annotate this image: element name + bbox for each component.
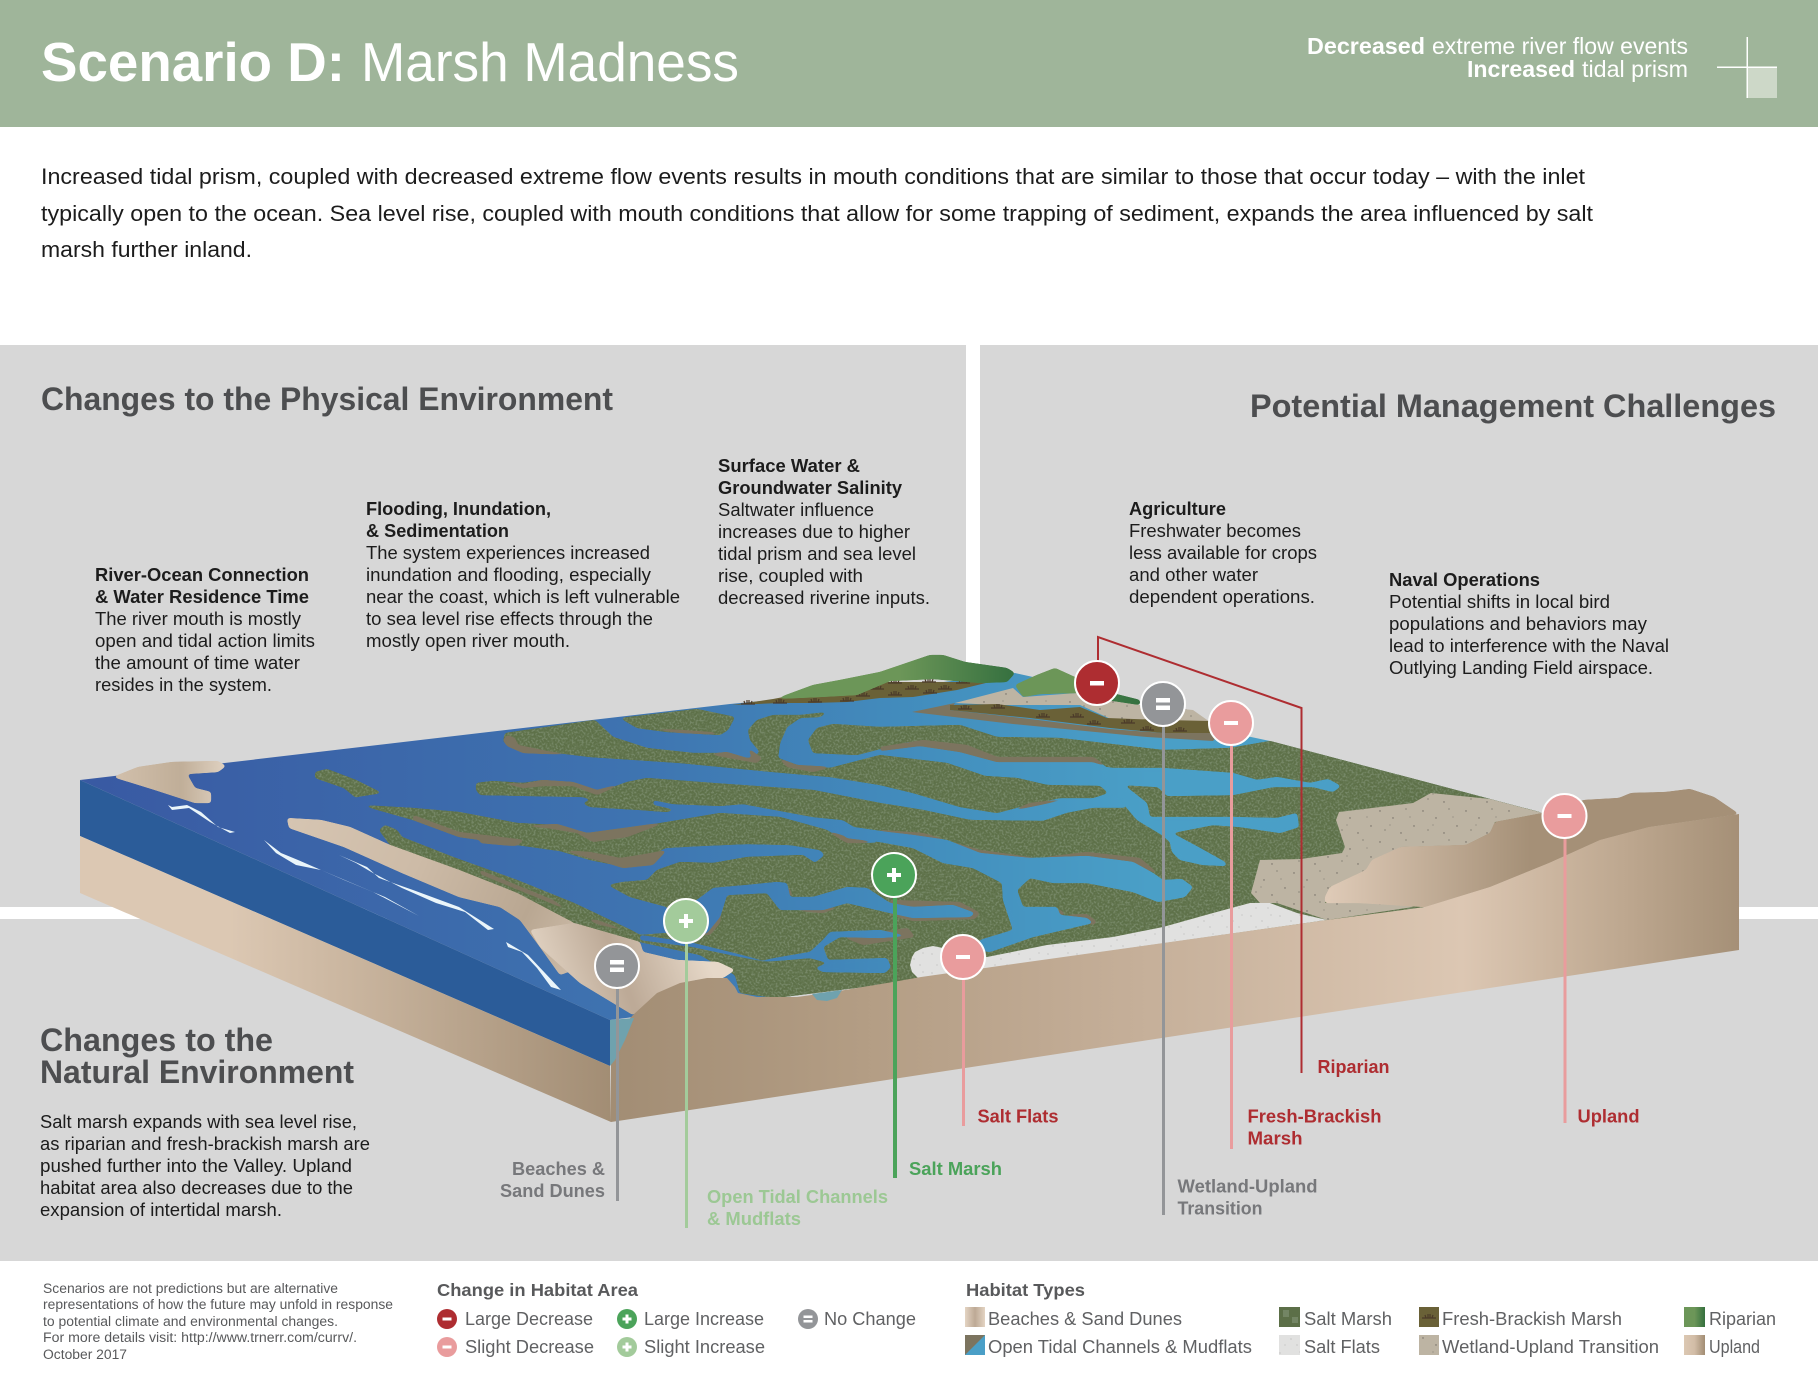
text block: agriculture: Freshwater becomes [1129, 521, 1301, 541]
callout: salt marsh [872, 853, 1002, 1179]
text block: flooding: mostly open river mouth. [366, 631, 570, 651]
legend item: slight increase: Slight Increase [644, 1337, 765, 1357]
riparian rear hill [1015, 668, 1140, 705]
callout: riparian [1075, 637, 1390, 1077]
callout: open tidal channels and mudflats: & Mudflats [707, 1209, 801, 1229]
legend: habitat types [965, 1280, 1776, 1357]
legend item: salt flats [1279, 1335, 1380, 1357]
callout: wetland-upland transition [1141, 682, 1318, 1218]
channel cross-section at corner [610, 1018, 634, 1066]
text block: salinity: decreased riverine inputs. [718, 588, 930, 608]
header band [0, 0, 1818, 127]
icon: scenario quadrant [1717, 37, 1777, 98]
callout: beaches and sand dunes: Beaches & [512, 1159, 605, 1179]
legend item: slight decrease: Slight Decrease [465, 1337, 594, 1357]
legend item: salt marsh [1279, 1307, 1392, 1329]
text block: agriculture: Agriculture [1129, 499, 1226, 519]
text block: naval operations: Naval Operations [1389, 570, 1540, 590]
scenario drivers: extreme river flow events [1432, 33, 1688, 59]
footer disclaimer: representations of how the future may unfold in response [43, 1297, 393, 1312]
footer disclaimer: For more details visit: http://www.trnerr.com/currv/. [43, 1330, 357, 1345]
text block: flooding: to sea level rise effects through the [366, 609, 653, 629]
legend: change in habitat area [437, 1280, 916, 1357]
heading: natural environment: Changes to the [40, 1022, 273, 1058]
intro text: marsh further inland. [41, 237, 252, 262]
heading: physical environment: Changes to the Physical Environment [41, 381, 613, 417]
text block: salinity [718, 456, 930, 608]
callout: fresh-brackish marsh [1209, 701, 1382, 1149]
mudflats [413, 728, 1160, 950]
ocean side face [80, 780, 610, 1066]
panel: management challenges background [980, 345, 1818, 907]
callout: upland: Upland [1578, 1106, 1640, 1126]
title: Scenario D: [41, 31, 345, 93]
text block: flooding: near the coast, which is left vulnerable [366, 587, 680, 607]
footer disclaimer: October 2017 [43, 1347, 127, 1362]
wetland-upland transition: rear [955, 688, 1210, 725]
title [41, 31, 739, 93]
legend item: upland: Upland [1709, 1337, 1760, 1357]
beach and dunes [287, 818, 600, 975]
text block: natural environment: pushed further into the Valley. Upland [40, 1156, 352, 1176]
legend item: fresh-brackish marsh: Fresh-Brackish Marsh [1442, 1309, 1622, 1329]
intro text [41, 164, 1593, 262]
text block: salinity: tidal prism and sea level [718, 544, 916, 564]
intro text: typically open to the ocean. Sea level rise, coupled with mouth conditions that allow for some trapping of sediment, expands the area influenced by salt [41, 201, 1593, 226]
text block: salinity: rise, coupled with [718, 566, 863, 586]
text block: river-ocean connection: the amount of time water [95, 653, 300, 673]
text block: river-ocean connection: & Water Residence Time [95, 587, 309, 607]
legend: change in habitat area: Change in Habitat Area [437, 1280, 638, 1300]
callout: beaches and sand dunes [500, 944, 639, 1201]
scenario drivers: tidal prism [1582, 56, 1688, 82]
callout: salt flats: Salt Flats [978, 1106, 1058, 1126]
legend item: large increase: Large Increase [644, 1309, 764, 1329]
block diagram of estuary [80, 655, 1739, 1122]
text block: flooding: & Sedimentation [366, 521, 509, 541]
water surface base [80, 673, 1543, 1020]
callout: open tidal channels and mudflats: Open Tidal Channels [707, 1187, 888, 1207]
riparian hill [775, 655, 1015, 699]
text block: natural environment: habitat area also decreases due to the [40, 1178, 353, 1198]
text block: naval operations: populations and behaviors may [1389, 614, 1647, 634]
upland back slope [1325, 789, 1739, 907]
panel: natural environment background [0, 919, 1818, 1261]
text block: flooding [366, 499, 680, 651]
text block: naval operations: Potential shifts in local bird [1389, 592, 1610, 612]
legend item: riparian [1684, 1307, 1776, 1329]
callout: beaches and sand dunes: Sand Dunes [500, 1181, 605, 1201]
callout: salt marsh: Salt Marsh [909, 1159, 1002, 1179]
legend item: no change: No Change [824, 1309, 916, 1329]
callout: riparian: Riparian [1318, 1057, 1390, 1077]
wetland-upland transition: lower [1251, 793, 1543, 920]
heading: natural environment: Natural Environment [40, 1054, 354, 1090]
text block: natural environment: expansion of intertidal marsh. [40, 1200, 282, 1220]
salt flats [910, 903, 1327, 978]
title: Marsh Madness [361, 31, 739, 93]
legend item: riparian: Riparian [1709, 1309, 1776, 1329]
text block: flooding: The system experiences increased [366, 543, 650, 563]
panel: physical environment background [0, 345, 966, 907]
beach at river mouth [530, 923, 735, 1015]
text block: salinity: Saltwater influence [718, 500, 874, 520]
scenario drivers [1307, 33, 1688, 82]
text block: natural environment [40, 1112, 370, 1220]
callout: fresh-brackish marsh: Fresh-Brackish [1248, 1106, 1382, 1126]
marsh islands [315, 709, 1543, 998]
text block: river-ocean connection: The river mouth is mostly [95, 609, 301, 629]
legend item: large decrease: Large Decrease [465, 1309, 593, 1329]
footer disclaimer: Scenarios are not predictions but are alternative [43, 1281, 338, 1296]
mud bank rear [912, 703, 1220, 741]
footer disclaimer [43, 1281, 393, 1362]
text block: agriculture: dependent operations. [1129, 587, 1315, 607]
intro text: Increased tidal prism, coupled with decreased extreme flow events results in mouth conditions that are similar to those that occur today – with the inlet [41, 164, 1585, 189]
text block: flooding: Flooding, Inundation, [366, 499, 551, 519]
legend item: salt marsh: Salt Marsh [1304, 1309, 1392, 1329]
legend item: wetland-upland transition: Wetland-Upland Transition [1442, 1337, 1659, 1357]
heading: natural environment [40, 1022, 354, 1090]
scenario drivers: Decreased [1307, 33, 1425, 59]
text block: naval operations: lead to interference with the Naval [1389, 636, 1669, 656]
legend item: beaches and sand dunes: Beaches & Sand Dunes [988, 1309, 1182, 1329]
text block: natural environment: as riparian and fresh-brackish marsh are [40, 1134, 370, 1154]
legend item: upland [1684, 1335, 1760, 1357]
footer disclaimer: to potential climate and environmental changes. [43, 1314, 338, 1329]
text block: naval operations [1389, 570, 1669, 678]
text block: river-ocean connection: River-Ocean Connection [95, 565, 309, 585]
ocean waves [168, 805, 561, 990]
callout: fresh-brackish marsh: Marsh [1248, 1128, 1302, 1148]
channel cross-section at front [812, 990, 842, 1001]
text block: salinity: Groundwater Salinity [718, 478, 902, 498]
text block: river-ocean connection: resides in the system. [95, 675, 272, 695]
text block: river-ocean connection: open and tidal action limits [95, 631, 315, 651]
callout: salt flats [941, 935, 1058, 1126]
tidal channels [640, 767, 1341, 973]
right soil face [611, 814, 1739, 1122]
callout: open tidal channels and mudflats [664, 899, 888, 1229]
callout: wetland-upland transition: Transition [1178, 1198, 1262, 1218]
text block: naval operations: Outlying Landing Field airspace. [1389, 658, 1653, 678]
callout: upland [1542, 794, 1640, 1126]
legend item: salt flats: Salt Flats [1304, 1337, 1380, 1357]
text block: agriculture: and other water [1129, 565, 1258, 585]
scenario drivers: Increased [1467, 56, 1575, 82]
text block: agriculture: less available for crops [1129, 543, 1317, 563]
legend item: open tidal channels: Open Tidal Channels & Mudflats [988, 1337, 1252, 1357]
callout: wetland-upland transition: Wetland-Upland [1178, 1176, 1318, 1196]
text block: flooding: inundation and flooding, especially [366, 565, 651, 585]
north dune [113, 761, 226, 803]
text block: agriculture [1129, 499, 1317, 607]
heading: management challenges: Potential Management Challenges [1250, 388, 1776, 424]
text block: salinity: Surface Water & [718, 456, 860, 476]
fresh-brackish band: front [950, 704, 1210, 733]
text block: natural environment: Salt marsh expands with sea level rise, [40, 1112, 357, 1132]
legend: habitat types: Habitat Types [966, 1280, 1085, 1300]
fresh-brackish band: rear [732, 678, 990, 705]
text block: river-ocean connection [95, 565, 315, 695]
text block: salinity: increases due to higher [718, 522, 910, 542]
left soil face [80, 836, 611, 1122]
